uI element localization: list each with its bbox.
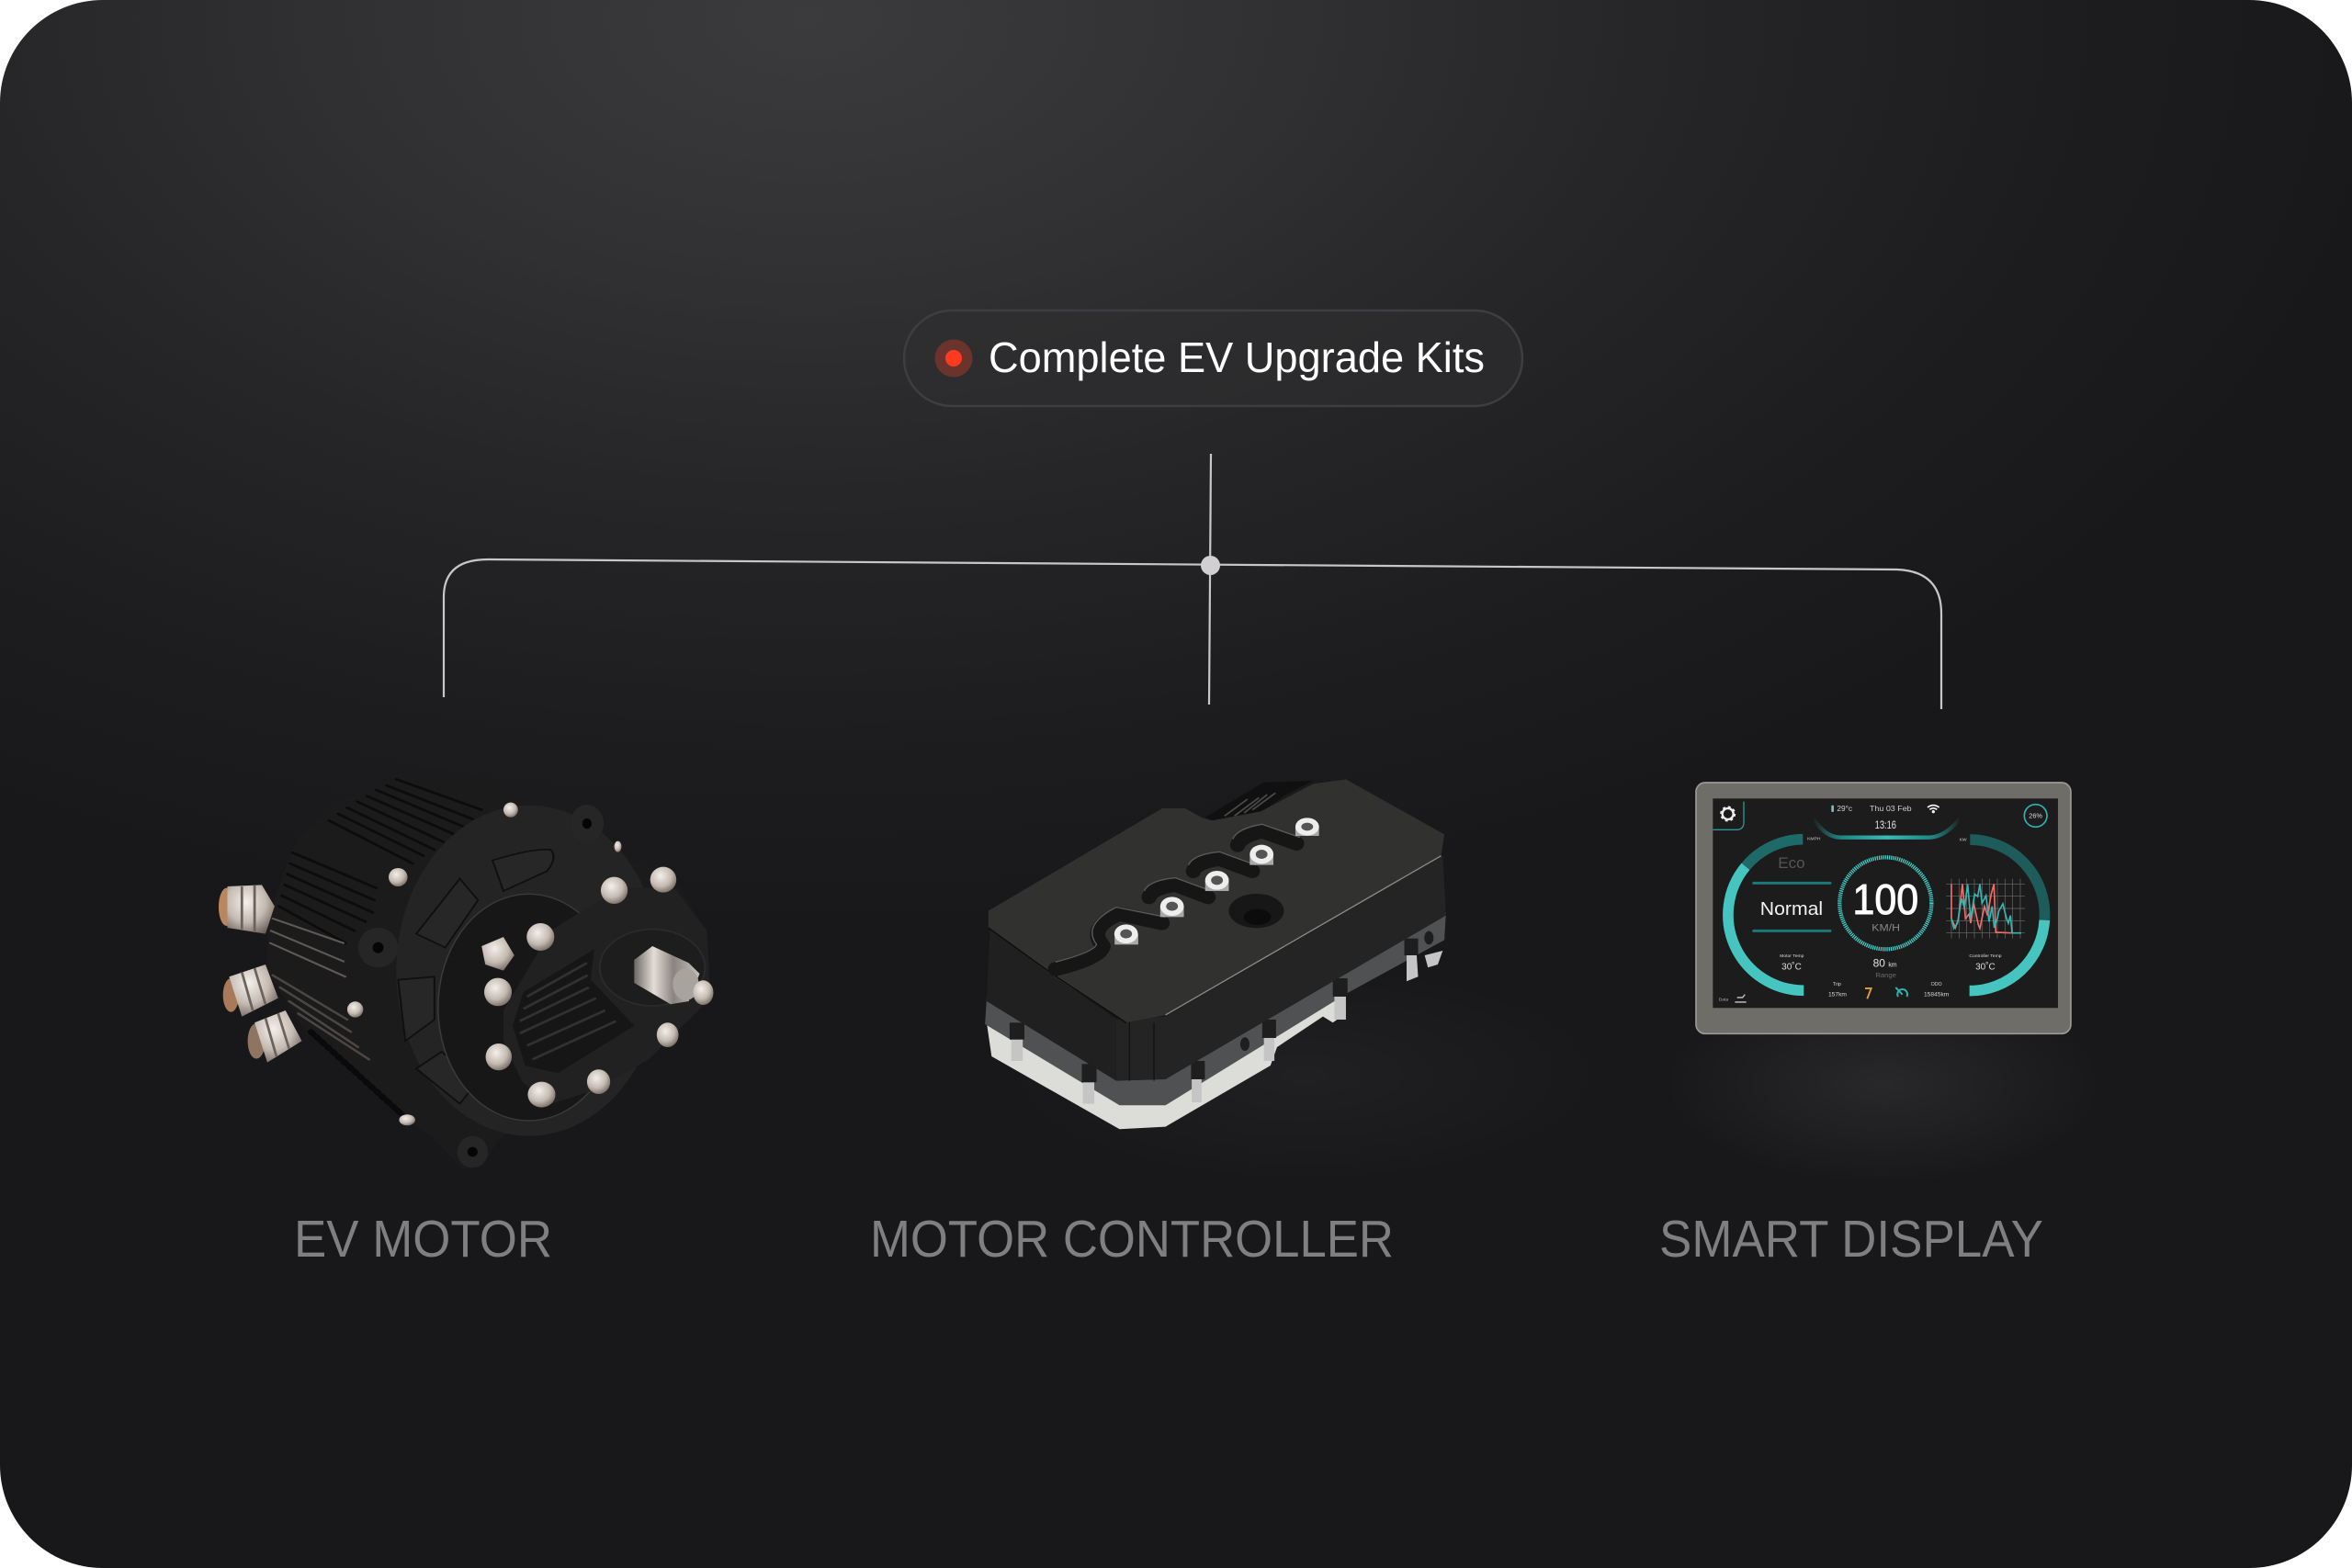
sensor port (1228, 894, 1283, 928)
range readout (1873, 957, 1897, 979)
top bowl (1813, 818, 1961, 838)
temperature readouts (1780, 953, 2002, 973)
trip and odometer: ODO (1931, 982, 1942, 987)
gauge labels (1807, 837, 1967, 842)
terminal grooves (1056, 831, 1296, 969)
temperature readouts: 30˚C (1781, 962, 1802, 973)
left side wall (987, 930, 1116, 1081)
lid (989, 779, 1444, 1022)
temperature readouts: Motor Temp (1780, 953, 1804, 959)
display bezel (1696, 783, 2071, 1033)
temperature readouts: 30˚C (1975, 962, 1996, 973)
gauge icon (1895, 987, 1907, 997)
range readout: 80 km (1873, 957, 1897, 970)
product: smart display (1696, 783, 2071, 1033)
motor housing (267, 769, 710, 1169)
drive mode (1754, 854, 1830, 931)
inner recess (438, 894, 619, 1121)
label: motor controller: MOTOR CONTROLLER (870, 1210, 1394, 1269)
speedometer: KM/H (1871, 922, 1900, 933)
trip and odometer: Trip (1833, 982, 1841, 987)
data label and scooter: Data (1719, 998, 1728, 1003)
connector lines (444, 454, 1941, 709)
right gauge (1970, 840, 2045, 991)
white base (987, 989, 1346, 1129)
drive mode: Eco (1778, 854, 1805, 872)
fuel icon (1865, 988, 1871, 998)
status bar (1831, 804, 1912, 831)
temperature readouts: Controller Temp (1969, 953, 2002, 959)
slots (1010, 931, 1433, 1082)
gauge labels: KW (1960, 837, 1967, 842)
screen (1713, 798, 2058, 1008)
right side wall (1116, 856, 1446, 1081)
flange panels (398, 850, 554, 1104)
ribbed plate (513, 949, 634, 1073)
speedometer (1839, 857, 1931, 949)
product: motor controller (985, 779, 1446, 1129)
power chart (1946, 879, 2025, 939)
output shaft (634, 946, 699, 1004)
heading pill (904, 310, 1522, 406)
status bar: 13:16 (1875, 819, 1896, 831)
label: EV motor: EV MOTOR (294, 1210, 552, 1269)
speedometer: 100 (1852, 875, 1918, 923)
terminals (1114, 818, 1319, 944)
battery ring (2024, 805, 2047, 827)
trip and odometer (1828, 982, 1950, 998)
front flange (396, 806, 662, 1136)
label: smart display: SMART DISPLAY (1659, 1210, 2043, 1269)
bolts (347, 803, 713, 1125)
settings icon (1713, 802, 1744, 829)
wifi icon (1928, 806, 1939, 812)
red status dot (935, 340, 972, 377)
trip and odometer: 15845km (1924, 991, 1950, 998)
drive mode: Normal (1760, 899, 1823, 919)
shaft collar (600, 930, 705, 1006)
connector node (1201, 556, 1220, 575)
product: EV motor (219, 769, 713, 1169)
status bar: Thu 03 Feb (1870, 804, 1912, 813)
gearbox plate (503, 888, 710, 1105)
battery ring: 26% (2029, 812, 2042, 820)
side clips (1012, 951, 1442, 1104)
heading text: Complete EV Upgrade Kits (989, 333, 1485, 381)
cable glands (219, 885, 302, 1063)
range readout: Range (1875, 971, 1896, 979)
data label and scooter (1719, 995, 1747, 1003)
status bar: 29°c (1837, 804, 1852, 813)
gauge labels: KMPH (1807, 837, 1821, 842)
trip and odometer: 157km (1828, 991, 1847, 998)
cooling ribs (270, 779, 481, 1118)
back connector (1204, 781, 1313, 822)
mounting ears (358, 805, 604, 1168)
grey band (985, 912, 1446, 1105)
left gauge (1728, 840, 1804, 990)
